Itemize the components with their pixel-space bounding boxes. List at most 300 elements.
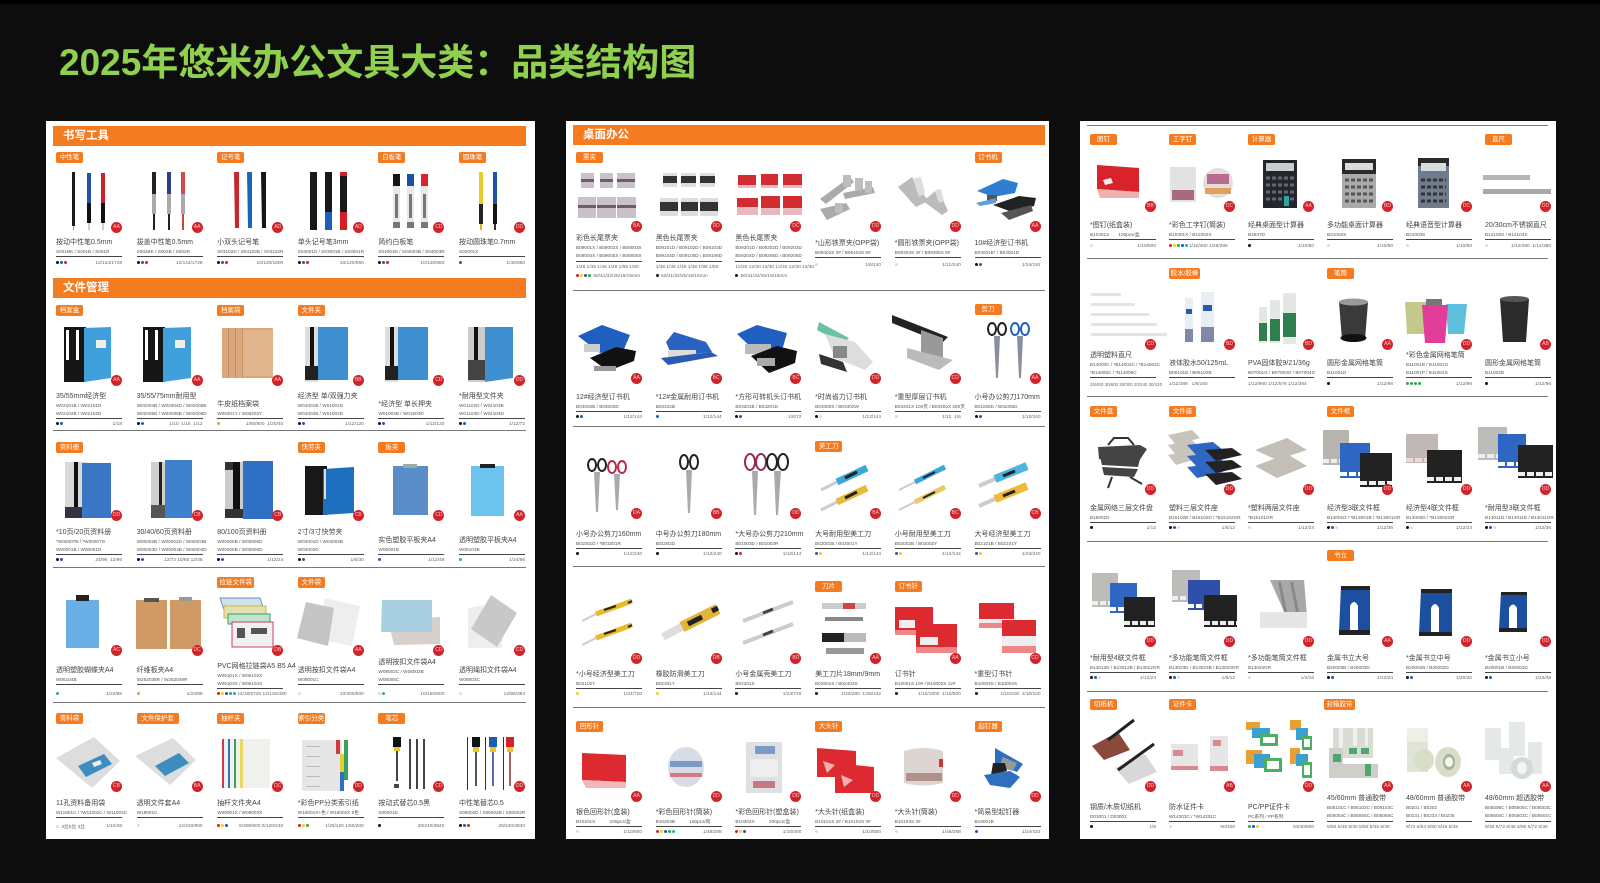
badge: DD (1542, 638, 1549, 644)
product: 中性笔替芯0.5 (459, 713, 525, 830)
badge (950, 221, 961, 232)
spec (815, 670, 881, 698)
badge (790, 373, 801, 384)
spec: 12/240/960 (179, 824, 203, 828)
badge (631, 373, 642, 384)
spec: B09101D / B09102D / B09103D (656, 245, 722, 250)
spec: B10003S / B10004S (974, 681, 1017, 686)
badge (1540, 339, 1551, 350)
product: 11孔资料备用袋 (56, 713, 122, 830)
spec: 10#经济型订书机 (974, 240, 1028, 247)
spec: W00002B / W00002D / W00003B (137, 539, 206, 544)
icon: rubber knife (654, 595, 724, 665)
spec: 1/12/480 1/12/360 (1511, 244, 1551, 248)
icon: yellow knives (574, 595, 644, 665)
spec (56, 238, 122, 266)
badge: AA (952, 655, 959, 661)
badge: DD (1226, 638, 1233, 644)
product: 按动圆珠笔 (459, 172, 525, 266)
badge: BC (713, 375, 720, 381)
spec (735, 234, 801, 280)
badge (1461, 781, 1472, 792)
spec: *重型厚层订书机 (895, 394, 947, 401)
tag: 起钉器 (974, 721, 1002, 732)
spec (1406, 654, 1472, 682)
product: 经典语音型计算器 (1406, 134, 1472, 250)
tag: 文件保护套 (137, 713, 179, 724)
badge (1540, 201, 1551, 212)
badge (711, 653, 722, 664)
spec: 1/25/120 1/50/200 (325, 824, 364, 828)
icon: utility knives (972, 450, 1042, 520)
tag: 票夹 (576, 152, 603, 163)
product: 黑色长尾票夹 盒装 (735, 152, 801, 280)
spec: 1/24/96 (509, 558, 525, 562)
spec: W14203C / *W14201C (1169, 814, 1216, 819)
heading: 桌面办公 (573, 125, 1045, 145)
spec (656, 530, 722, 558)
spec: W05001B (378, 547, 399, 552)
badge: BD (792, 655, 799, 661)
icon: calculator (1246, 150, 1316, 220)
icon: mesh pen holder (1483, 287, 1553, 357)
spec: 1/12/144 (862, 414, 881, 420)
spec (1248, 654, 1314, 682)
spec: 25/400 30/600 20/300 20/240 30/120 (1090, 382, 1162, 386)
spec: 透明塑料直尺 (1090, 352, 1132, 359)
badge: DD (1463, 486, 1470, 492)
spec: 1/18 (113, 422, 122, 426)
spec: B01001D / *B01001R (576, 541, 621, 546)
icon: file holders (1167, 568, 1237, 638)
icon: staple remover (972, 733, 1042, 803)
spec: W06103X / W06104X (217, 681, 262, 686)
spec: 小双头记号笔 (217, 239, 259, 246)
spec: W00005B / W00005D (217, 539, 263, 544)
badge: BB (713, 510, 720, 516)
spec (298, 799, 364, 830)
row: 书写工具 (56, 152, 525, 266)
icon: file holders (1325, 423, 1395, 493)
tag: 笔芯 (378, 713, 405, 724)
badge (1461, 636, 1472, 647)
spec: 1/10/400 (783, 830, 801, 834)
spec (137, 528, 203, 564)
tag: 档案盒 (56, 305, 83, 316)
spec: 透明塑胶平板夹A4 (459, 537, 517, 544)
tag: 文件框: 文件框 (1331, 408, 1350, 415)
spec: 1/14/144 (703, 692, 722, 696)
badge: AD (355, 224, 362, 230)
icon: staple boxes (893, 595, 963, 665)
spec (378, 799, 444, 830)
spec: B02501S / B02402S (815, 681, 858, 686)
product: 单头记号笔 (298, 172, 364, 266)
icon: display book (135, 455, 205, 525)
spec: W252038R / W252049R (137, 677, 187, 682)
spec: 6/300/600 5/120/240 (239, 824, 283, 828)
icon: thumbtack box (1088, 150, 1158, 220)
icon: mesh tray (1088, 423, 1158, 493)
product: 48/60mm 超透胶带 (1485, 699, 1551, 831)
badge (1145, 484, 1156, 495)
spec: B10401S 100pcs/盒 (1090, 232, 1140, 237)
spec: 1/24/96 (106, 692, 122, 696)
spec: W04001D / W04002B (298, 539, 343, 544)
spec (1327, 504, 1393, 532)
badge: AA (1384, 638, 1391, 644)
icon: translucent snap folders (296, 590, 366, 660)
badge (1224, 484, 1235, 495)
spec (895, 239, 961, 280)
spec: 48/60mm 普通胶带 (1406, 795, 1465, 802)
badge (1030, 791, 1040, 802)
spec (217, 799, 283, 830)
icon: paperclip box (574, 733, 644, 803)
spec: 透明塑胶蝴蝶夹A4 (56, 667, 114, 674)
tag: 文件袋: 文件袋 (302, 579, 321, 586)
spec: B13023D / B13023B / B13023GR (1169, 665, 1239, 670)
badge: AA (113, 224, 120, 230)
spec: B13011D / B13011B / B13011GR (1485, 515, 1554, 520)
badge: DD (516, 377, 523, 383)
badge (1145, 636, 1156, 647)
tag: 索引分类: 索引分类 (298, 715, 324, 722)
product: *彩色PP分类索引纸 (298, 713, 364, 830)
spec (1169, 504, 1235, 532)
spec (1169, 803, 1235, 831)
badge (1224, 636, 1235, 647)
spec: 防水证件卡 (1169, 804, 1204, 811)
badge: AA (1542, 783, 1549, 789)
spec: *耐用型文件夹 (459, 393, 504, 400)
spec: W08002C / W08002B (378, 669, 424, 674)
product: *方形可转机头订书机 (735, 304, 801, 421)
spec: 牛皮纸档案袋 (217, 401, 259, 408)
spec (815, 239, 881, 280)
spec: S04003D / S04003B / S04003R (378, 249, 445, 254)
spec (1406, 351, 1472, 388)
icon: coloured pen holders (1404, 287, 1474, 357)
badge (111, 645, 122, 656)
spec (735, 808, 801, 836)
row: 美工刀 刀片 订书针 (566, 581, 1049, 698)
tag: 胶水/胶棒: 胶水/胶棒 (1171, 270, 1198, 277)
tag: 中性笔: 中性笔 (60, 154, 79, 161)
badge (711, 508, 722, 519)
spec (459, 536, 525, 564)
badge (1224, 339, 1235, 350)
product: 牛皮纸档案袋 (217, 328, 283, 426)
product: 圆形金属网格笔筒 (1327, 268, 1393, 388)
product: 银色回形针(盒装) (576, 721, 642, 836)
spec: 10/300/600 (340, 692, 364, 696)
spec (56, 528, 122, 564)
badge: AA (1305, 203, 1312, 209)
panel: 书写工具与文件管理 (46, 121, 535, 839)
spec: *山形铁票夹(OPP袋) (815, 240, 879, 247)
tag: 拉链文件袋: 拉链文件袋 (219, 579, 252, 586)
spec: B06101B / B06102B (1169, 370, 1211, 375)
spec (298, 392, 364, 426)
spec: 30/40/60页资料册 (137, 529, 192, 536)
badge (514, 510, 525, 521)
spec: *彩色PP分类索引纸 (298, 800, 359, 807)
spec (217, 238, 284, 266)
product: 大号耐用型美工刀 (815, 441, 881, 558)
badge: DD (792, 793, 800, 799)
spec: 1/48 1/36 1/48 1/48 1/96 1/60 (576, 264, 639, 270)
badge (1461, 201, 1472, 212)
spec: 10/120/960 (340, 260, 364, 266)
badge: DD (1031, 793, 1039, 799)
spec: 1/12/144 (942, 552, 961, 556)
product: *耐用型4联文件框 (1090, 550, 1156, 682)
spec: 45/60mm 普通胶带 (1327, 795, 1386, 802)
badge (272, 645, 283, 656)
badge (192, 510, 203, 521)
spec: 1/6/120 (865, 262, 881, 268)
icon: display book (215, 455, 285, 525)
badge (1030, 508, 1040, 519)
spec (137, 666, 203, 698)
badge (950, 508, 961, 519)
spec: B11001B / B11001G (1406, 362, 1448, 367)
spec (137, 799, 203, 830)
tag: 圆珠笔 (459, 152, 486, 163)
icon: heavy staple boxes (972, 595, 1042, 665)
spec: *彩色回形针(筒装) (656, 809, 712, 816)
product: *耐用型3联文件框 (1485, 406, 1551, 532)
badge (1540, 636, 1551, 647)
icon: box file (64, 327, 111, 382)
icon: clear tape rolls (1483, 718, 1553, 788)
spec: 1/10 1/18 1/12 (169, 422, 203, 426)
badge (790, 791, 801, 802)
spec (1406, 504, 1472, 532)
badge: BD (1226, 341, 1233, 347)
spec: S06002D / S06002B / S06002R (459, 810, 525, 815)
spec: B05504C / B05502C / B05501C (1485, 813, 1551, 818)
badge (870, 221, 881, 232)
spec: 橡胶防滑美工刀 (656, 671, 705, 678)
spec: 1/12/96 (1456, 382, 1472, 386)
badge (870, 653, 881, 664)
spec: 10/120/1800 (256, 260, 283, 266)
product: *金属书立中号 (1406, 550, 1472, 682)
product: 液体胶水50/125mL (1169, 268, 1235, 388)
product: *重型厚层订书机 (895, 304, 961, 421)
spec: B0231 / B0233 / B0235 (1406, 813, 1454, 818)
icon: lever arch file (296, 455, 366, 525)
spec: B13001D / *B13001B / *B13001GR (1327, 515, 1400, 520)
badge: DD (1226, 486, 1233, 492)
row: 订书机 剪刀 (566, 304, 1049, 421)
tag: 计算器 (1248, 134, 1275, 145)
badge: AB (1542, 341, 1549, 347)
spec (815, 808, 881, 836)
spec: B20001B / B20001D (1485, 665, 1528, 670)
badge: DD (1305, 486, 1312, 492)
spec: W06101X / W06102X (217, 673, 262, 678)
row: 文件盘 文件座 文件框 (1080, 406, 1556, 532)
badge: DD (1147, 783, 1154, 789)
row: 剪刀 美工刀 (566, 441, 1049, 558)
tag: 订书机 (974, 152, 1002, 163)
spec: 48/60mm 超透胶带 (1485, 795, 1544, 802)
spec: 彩色长尾票夹 (576, 235, 618, 242)
badge: AA (274, 377, 281, 383)
spec: W01002B / W01002D (298, 411, 343, 416)
spec (1169, 654, 1235, 682)
tag: 刀片: 刀片 (822, 583, 835, 590)
badge (353, 375, 364, 386)
badge: CD (435, 783, 442, 789)
spec: 1/24/240 (1022, 552, 1040, 556)
tag: 索引分类 (298, 713, 325, 724)
spec: B02002B / B02002Y (895, 541, 937, 546)
spec: 2寸/3寸快劳夹 (298, 529, 343, 536)
row: 资料袋 文件保护套 抽杆夹 索引分类 笔芯 (46, 713, 535, 830)
spec (974, 239, 1040, 280)
badge (192, 781, 203, 792)
badge (1224, 781, 1235, 792)
icon: clear clip box (733, 733, 803, 803)
spec: 10/120/960 (420, 260, 444, 266)
spec: 经典桌面型计算器 (1248, 222, 1304, 229)
badge (1030, 373, 1040, 384)
badge: BA (194, 783, 200, 789)
badge: AA (1032, 223, 1038, 229)
badge (950, 373, 961, 384)
icon: clipboard (54, 590, 124, 660)
spec: B03102B (656, 404, 675, 409)
spec: W00006B / W00006D (217, 547, 263, 552)
product: *塑料两层文件座 (1248, 406, 1314, 532)
spec (378, 658, 444, 698)
tag: 图钉: 图钉 (1097, 136, 1110, 143)
badge (870, 508, 881, 519)
icon: scissors (972, 320, 1042, 390)
tag: 刀片 (815, 581, 842, 592)
badge: CD (952, 375, 959, 381)
spec: 经济型3联文件框 (1327, 505, 1380, 512)
product: 小号办公剪刀170mm (974, 304, 1040, 421)
tag: 图钉 (1090, 134, 1117, 145)
spec: 圆形金属网格笔筒 (1327, 360, 1383, 367)
spec (298, 238, 364, 266)
badge: AA (872, 655, 879, 661)
badge: AA (194, 377, 200, 383)
spec: 1/12/144 (703, 414, 722, 420)
product: *简易型起钉器 (974, 721, 1040, 836)
badge: DD (952, 223, 959, 229)
tag: 资料袋 (56, 713, 83, 724)
badge (514, 222, 525, 233)
spec: 简约白板笔 (378, 239, 413, 246)
badge: DD (1305, 638, 1312, 644)
badge (870, 373, 881, 384)
spec: B09304S 4# / B09305S 5# (895, 250, 950, 255)
spec: 透明绳扣文件袋A4 (459, 667, 517, 674)
tag: 资料袋: 资料袋 (60, 715, 79, 722)
product: 透明塑胶蝴蝶夹A4 (56, 577, 122, 698)
product: 小号金属壳美工刀 (735, 581, 801, 698)
badge (1303, 636, 1314, 647)
badge (950, 653, 961, 664)
badge: BC (792, 375, 799, 381)
tag: 板夹: 板夹 (385, 444, 398, 451)
badge (1540, 484, 1551, 495)
spec (217, 528, 283, 564)
icon: markers (310, 172, 347, 230)
tag: 文件袋 (298, 577, 325, 588)
spec: 1/12/36 (1377, 526, 1393, 530)
tag: 大头针 (815, 721, 842, 732)
spec: 1/6/30 (350, 558, 364, 562)
badge (433, 375, 444, 386)
icon: fibreboard clipboards (135, 590, 205, 660)
spec: 圆形金属网格笔筒 (1485, 360, 1541, 367)
badge: DD (872, 375, 879, 381)
badge: DD (1542, 486, 1549, 492)
icon: scissors (733, 450, 803, 520)
tag: 白板笔: 白板笔 (382, 154, 402, 161)
spec: 12/96/384 (504, 692, 525, 696)
badge: DB (274, 647, 281, 653)
tag: 文件保护套: 文件保护套 (141, 715, 174, 722)
badge (1540, 781, 1551, 792)
spec (298, 528, 364, 564)
spec: 1/10/60 (1456, 244, 1472, 248)
badge (272, 222, 283, 233)
badge (353, 222, 364, 233)
spec (815, 530, 881, 558)
badge (272, 510, 283, 521)
spec: 12/144/1728 (176, 260, 203, 266)
spec: 小号耐用型美工刀 (895, 531, 951, 538)
badge: AA (355, 647, 362, 653)
tag: 直尺 (1485, 134, 1512, 145)
tag: 订书针 (895, 581, 922, 592)
spec (735, 530, 801, 558)
icon: capped gel pens (152, 172, 185, 230)
tag: 剪刀: 剪刀 (982, 306, 994, 313)
tag: 订书机: 订书机 (978, 154, 998, 161)
spec: B11001P / B11001S (1406, 370, 1448, 375)
tag: 圆珠笔: 圆珠笔 (463, 154, 482, 161)
spec: 12/180/720 12/120/480 (237, 692, 287, 696)
tag: 直尺: 直尺 (1492, 136, 1505, 143)
icon: mesh zip bags (215, 590, 285, 660)
spec: *金属书立中号 (1406, 655, 1451, 662)
spec: 1/20/40 (1456, 676, 1472, 680)
badge: DD (516, 783, 523, 789)
spec (974, 808, 1040, 836)
product: 抽杆文件夹A4 (217, 713, 283, 830)
icon: whiteboard markers (393, 174, 428, 228)
spec: 1/12/960 1/12/576 1/12/384 (1248, 382, 1307, 386)
spec: W01003B / W01003D (378, 411, 424, 416)
spec: 1/12/72 (509, 422, 525, 426)
spec: B01003D / B01003R (735, 541, 778, 546)
tag: 订书针: 订书针 (899, 583, 918, 590)
spec: PVA固体胶9/21/36g (1248, 360, 1310, 367)
spec: 12/72 10/60 12/48 (164, 558, 203, 562)
tag: 中性笔 (56, 152, 83, 163)
spec (815, 393, 881, 421)
icon: scissors (654, 450, 724, 520)
